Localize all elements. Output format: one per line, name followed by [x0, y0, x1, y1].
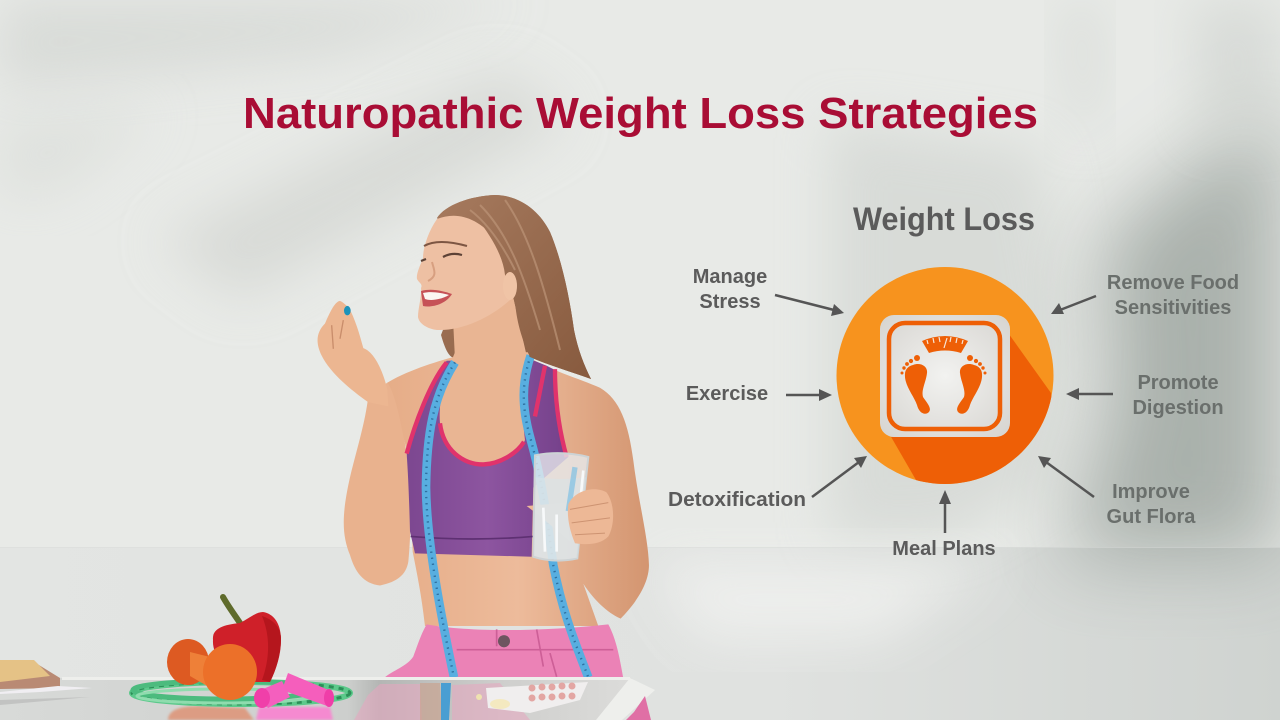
fingers over glass: [568, 489, 613, 544]
nose shading: [428, 262, 434, 281]
tape markings: [426, 356, 588, 677]
hair front: [437, 195, 591, 379]
blister packs of pills: [476, 682, 588, 713]
neckline skin: [440, 352, 530, 464]
woman: hair behind: [437, 195, 591, 379]
face: [417, 216, 516, 330]
orange circle: [836, 267, 1054, 484]
sports top: [407, 359, 568, 557]
table with reflections: [0, 677, 655, 720]
label: improve gut flora: Gut Flora: [1107, 506, 1196, 528]
diagram heading: Weight Loss: [853, 201, 1035, 237]
arrow: detoxification: [812, 456, 867, 497]
right foot: [957, 355, 986, 414]
label: promote digestion: Digestion: [1132, 397, 1224, 419]
stack of notebook and papers: [0, 660, 92, 705]
left foot: [900, 355, 930, 414]
label: manage stress: Manage: [693, 266, 767, 288]
table corner frame: [596, 678, 655, 720]
arrow: manage stress: [775, 295, 844, 316]
scale border: [889, 323, 1000, 429]
pink jeans: [383, 624, 623, 678]
woman's head: [417, 195, 591, 379]
label: improve gut flora: Improve: [1112, 481, 1190, 503]
arrow: promote digestion: [1066, 388, 1113, 400]
hand with fingers holding capsule: [318, 301, 388, 406]
measuring tape: [426, 356, 588, 677]
gauge ticks: [927, 337, 963, 348]
label: manage stress: Stress: [699, 291, 761, 313]
reflection of jeans and tape: [354, 683, 530, 720]
reflection of dumbbell and handle: [168, 706, 254, 720]
long shadow: [891, 336, 1052, 484]
finger lines: [332, 320, 343, 349]
table top edge: [62, 677, 630, 680]
arrow: exercise: [786, 389, 832, 401]
weight loss diagram: [668, 201, 1239, 560]
label: exercise: Exercise: [686, 383, 768, 405]
arrow: meal plans: [939, 490, 951, 533]
label: detoxification: Detoxification: [668, 489, 806, 511]
scale gauge: [922, 336, 968, 353]
woman holding pill and glass of water: [318, 298, 649, 678]
pink trim: [407, 362, 567, 464]
title: Naturopathic Weight Loss Strategies: [243, 89, 1038, 138]
waistband shading: [411, 536, 533, 539]
label: remove food sensitivities: Sensitivities: [1115, 297, 1231, 319]
neck: [453, 298, 527, 359]
finger lines: [570, 503, 610, 535]
orange dumbbell: [167, 639, 257, 700]
brow: [424, 242, 467, 246]
arrow: improve gut flora: [1038, 456, 1094, 497]
corner of jeans: [626, 696, 651, 720]
blue capsule: [344, 306, 351, 315]
scale icon: [880, 315, 1010, 437]
far hand behind glass: [527, 503, 570, 542]
pink rope handle: [254, 673, 334, 708]
jeans button and seams: [457, 629, 613, 677]
hair streaks: [470, 200, 560, 350]
arrow: remove food sensitivities: [1051, 296, 1096, 314]
mirror surface: [0, 678, 632, 720]
label: promote digestion: Promote: [1137, 372, 1219, 394]
glass of water: [533, 453, 588, 561]
left arm: [344, 383, 411, 585]
scale tile: [880, 315, 1010, 437]
label: meal plans: Meal Plans: [892, 538, 996, 560]
red bell pepper: [213, 597, 281, 682]
skipping rope: [132, 681, 350, 704]
ear: [503, 272, 517, 300]
torso and right arm: [387, 298, 649, 626]
eyes: [421, 254, 462, 261]
label: remove food sensitivities: Remove Food: [1107, 272, 1239, 294]
smile: [421, 290, 452, 306]
